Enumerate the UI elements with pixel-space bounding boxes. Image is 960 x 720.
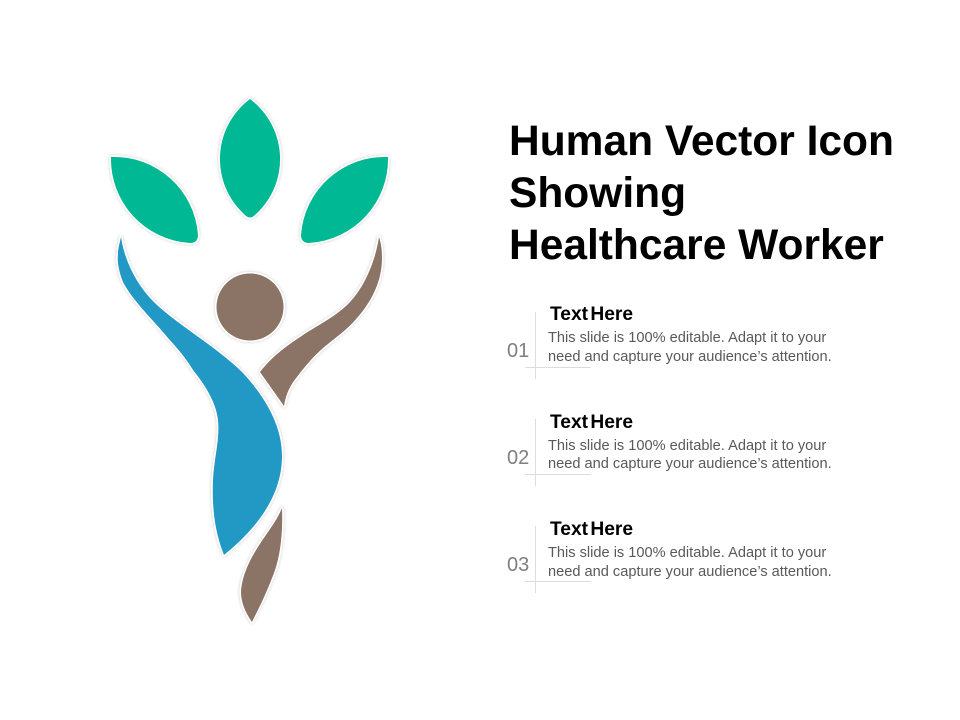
description 02 <box>548 438 832 472</box>
heading 02: Text Here <box>550 412 633 433</box>
description 01: need and capture your audience’s attention. <box>548 348 832 364</box>
heading 03: Text Here <box>550 519 633 540</box>
title: Human Vector Icon <box>509 118 894 165</box>
icon: blue body <box>118 237 282 555</box>
icon: right leaf <box>301 157 388 243</box>
icon: head <box>216 274 284 340</box>
human vector icon <box>108 96 391 624</box>
number 02: 02 <box>507 447 529 469</box>
description 01 <box>548 330 832 364</box>
title <box>509 118 894 269</box>
description 01: This slide is 100% editable. Adapt it to your <box>548 330 826 346</box>
icon: left leaf <box>111 157 198 243</box>
number 01: 01 <box>507 340 529 362</box>
icon: brown leg <box>241 508 282 622</box>
description 02: This slide is 100% editable. Adapt it to your <box>548 438 826 454</box>
icon: brown arm <box>260 237 382 406</box>
description 03 <box>548 544 832 580</box>
title: Showing <box>509 170 686 217</box>
item 03 <box>507 519 832 593</box>
description 03: need and capture your audience’s attention. <box>548 564 832 580</box>
item 02 <box>507 412 832 486</box>
title: Healthcare Worker <box>509 222 884 269</box>
item 01 <box>507 304 832 379</box>
description 03: This slide is 100% editable. Adapt it to your <box>548 544 826 560</box>
icon: centre leaf <box>220 99 280 218</box>
number 03: 03 <box>507 554 529 576</box>
description 02: need and capture your audience’s attention. <box>548 456 832 472</box>
heading 01: Text Here <box>550 304 633 325</box>
